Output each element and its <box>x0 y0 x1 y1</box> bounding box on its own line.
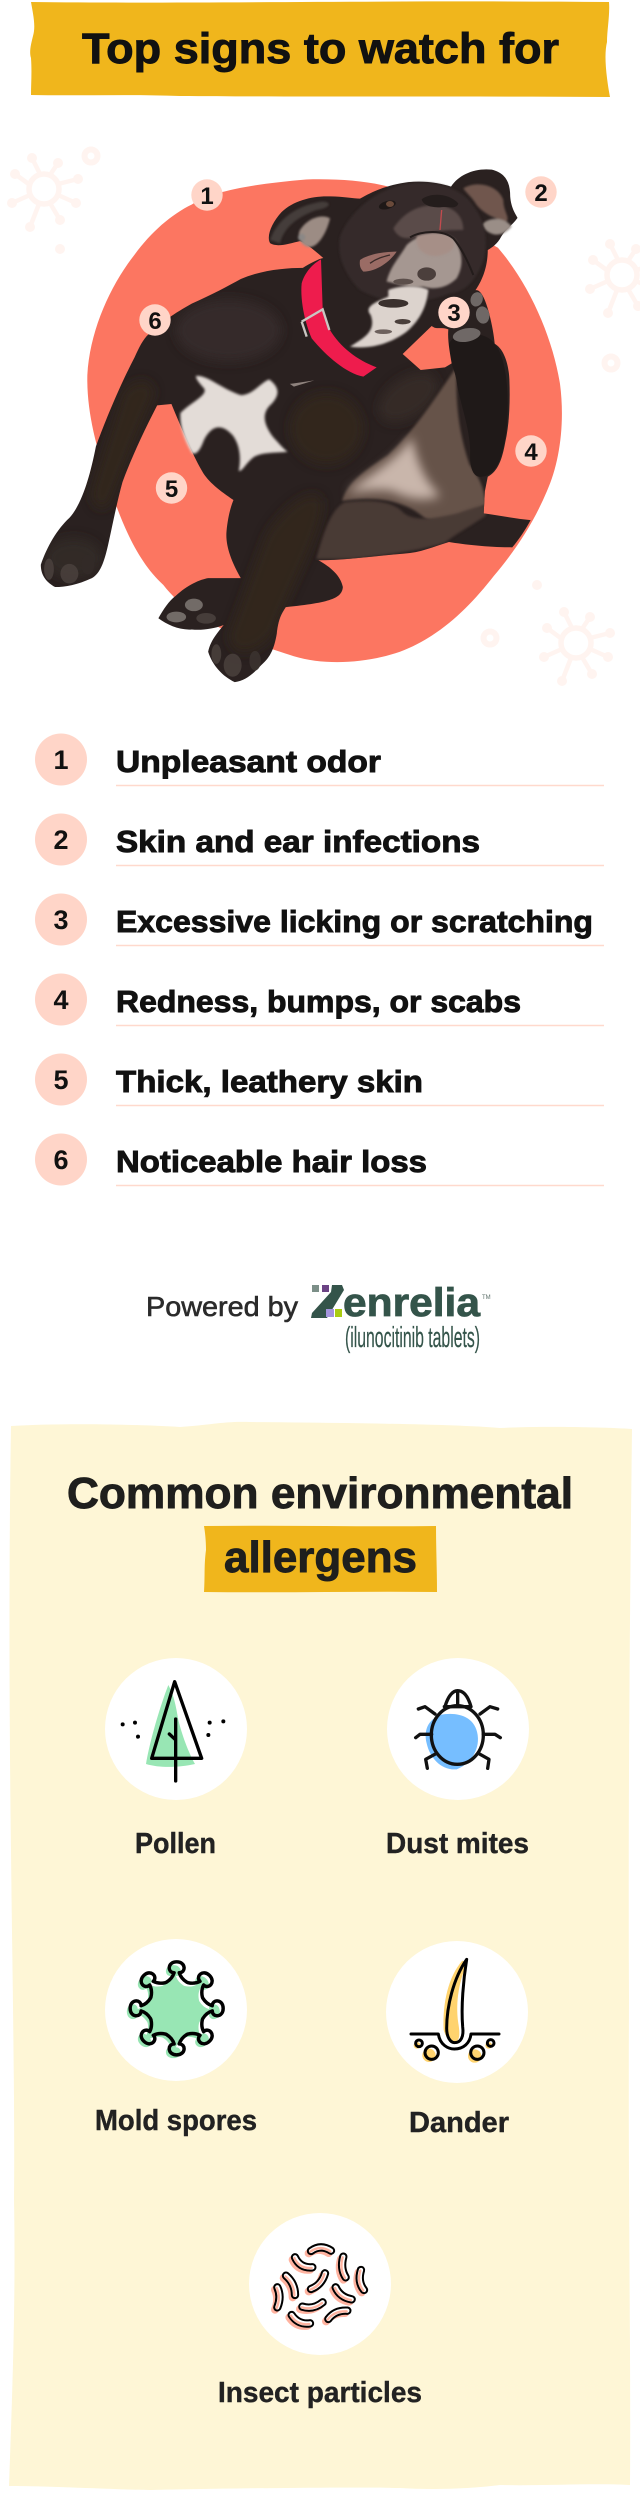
sign 1 <box>35 734 604 786</box>
panel: common environmental allergens <box>9 1422 632 2490</box>
zenrelia logo: (ilunocitinib tablets) <box>345 1322 480 1354</box>
marker 6 <box>139 304 171 336</box>
decorative allergen particles <box>7 150 640 686</box>
icon: mold spore <box>127 1962 223 2058</box>
sign 1: Unpleasant odor <box>116 744 381 779</box>
muzzle <box>393 205 463 238</box>
powered by text: Powered by <box>146 1291 298 1322</box>
title banner: Top signs to watch for <box>82 25 559 73</box>
dog photo illustration <box>41 169 531 682</box>
item: dust mites: Dust mites <box>386 1828 529 1860</box>
bottom paw pads <box>167 599 216 624</box>
marker 2: 2 <box>534 180 548 207</box>
item: insect particles: Insect particles <box>218 2377 422 2409</box>
item: pollen <box>105 1658 247 1860</box>
scratching arm <box>449 334 508 477</box>
icon: insect particles <box>275 2247 364 2326</box>
icon: hair follicle <box>411 1959 499 2063</box>
sign 2: Skin and ear infections <box>116 824 480 859</box>
sign 6: Noticeable hair loss <box>116 1144 427 1179</box>
collar buckle <box>302 309 329 337</box>
paw pads <box>452 290 491 344</box>
marker 5 <box>156 472 187 504</box>
sign 3 <box>35 894 604 946</box>
item: dander: Dander <box>409 2107 509 2139</box>
chin and throat <box>350 233 461 347</box>
item: dander <box>386 1941 528 2139</box>
eye <box>378 199 397 211</box>
sign 4: 4 <box>53 985 69 1015</box>
sign 5 <box>35 1054 604 1106</box>
zenrelia logo: enrelia <box>343 1281 481 1325</box>
item: dust mites <box>386 1658 529 1860</box>
paw toes <box>44 555 261 677</box>
item: pollen: Pollen <box>135 1828 216 1860</box>
sign 4: Redness, bumps, or scabs <box>116 984 521 1019</box>
zenrelia logo: TM <box>482 1295 491 1301</box>
sign 6 <box>35 1134 604 1186</box>
marker 5: 5 <box>165 476 178 503</box>
icon: pollen tree <box>121 1682 225 1781</box>
marker 6: 6 <box>148 308 162 335</box>
zenrelia logo <box>311 1281 491 1354</box>
marker 3: 3 <box>447 300 461 327</box>
marker 4: 4 <box>524 439 538 466</box>
coral blob <box>87 179 562 662</box>
marker 3 <box>438 297 470 328</box>
head details <box>270 183 512 377</box>
highlighted heading word: allergens <box>224 1533 417 1582</box>
sign 4 <box>35 974 604 1026</box>
nose <box>422 195 458 207</box>
marker 2 <box>525 176 557 208</box>
gap between chin and raised arm <box>403 326 452 370</box>
icon: dust mite <box>416 1691 500 1769</box>
chest white patch <box>180 376 288 471</box>
panel heading: Common environmental <box>67 1469 573 1518</box>
mouth <box>360 252 397 272</box>
marker 4 <box>515 435 547 467</box>
sign 2 <box>35 814 604 866</box>
highlighted heading word <box>204 1526 437 1592</box>
sign 5: 5 <box>53 1065 69 1095</box>
collar <box>301 259 377 377</box>
title banner <box>30 1 610 97</box>
item: mold spores <box>95 1939 257 2137</box>
sign 1: 1 <box>53 745 69 775</box>
marker 1 <box>191 179 223 211</box>
sign 6: 6 <box>53 1145 69 1175</box>
item: mold spores: Mold spores <box>95 2105 257 2137</box>
belly skin <box>316 366 486 559</box>
sign 3: 3 <box>53 905 69 935</box>
right ear inner <box>463 184 512 235</box>
face <box>339 183 486 302</box>
left ear <box>270 202 330 247</box>
signs list <box>35 734 604 1186</box>
sign 3: Excessive licking or scratching <box>116 904 593 939</box>
item: insect particles <box>218 2213 422 2409</box>
sign 2: 2 <box>53 825 69 855</box>
marker 1: 1 <box>200 183 214 210</box>
sign 5: Thick, leathery skin <box>116 1064 423 1099</box>
